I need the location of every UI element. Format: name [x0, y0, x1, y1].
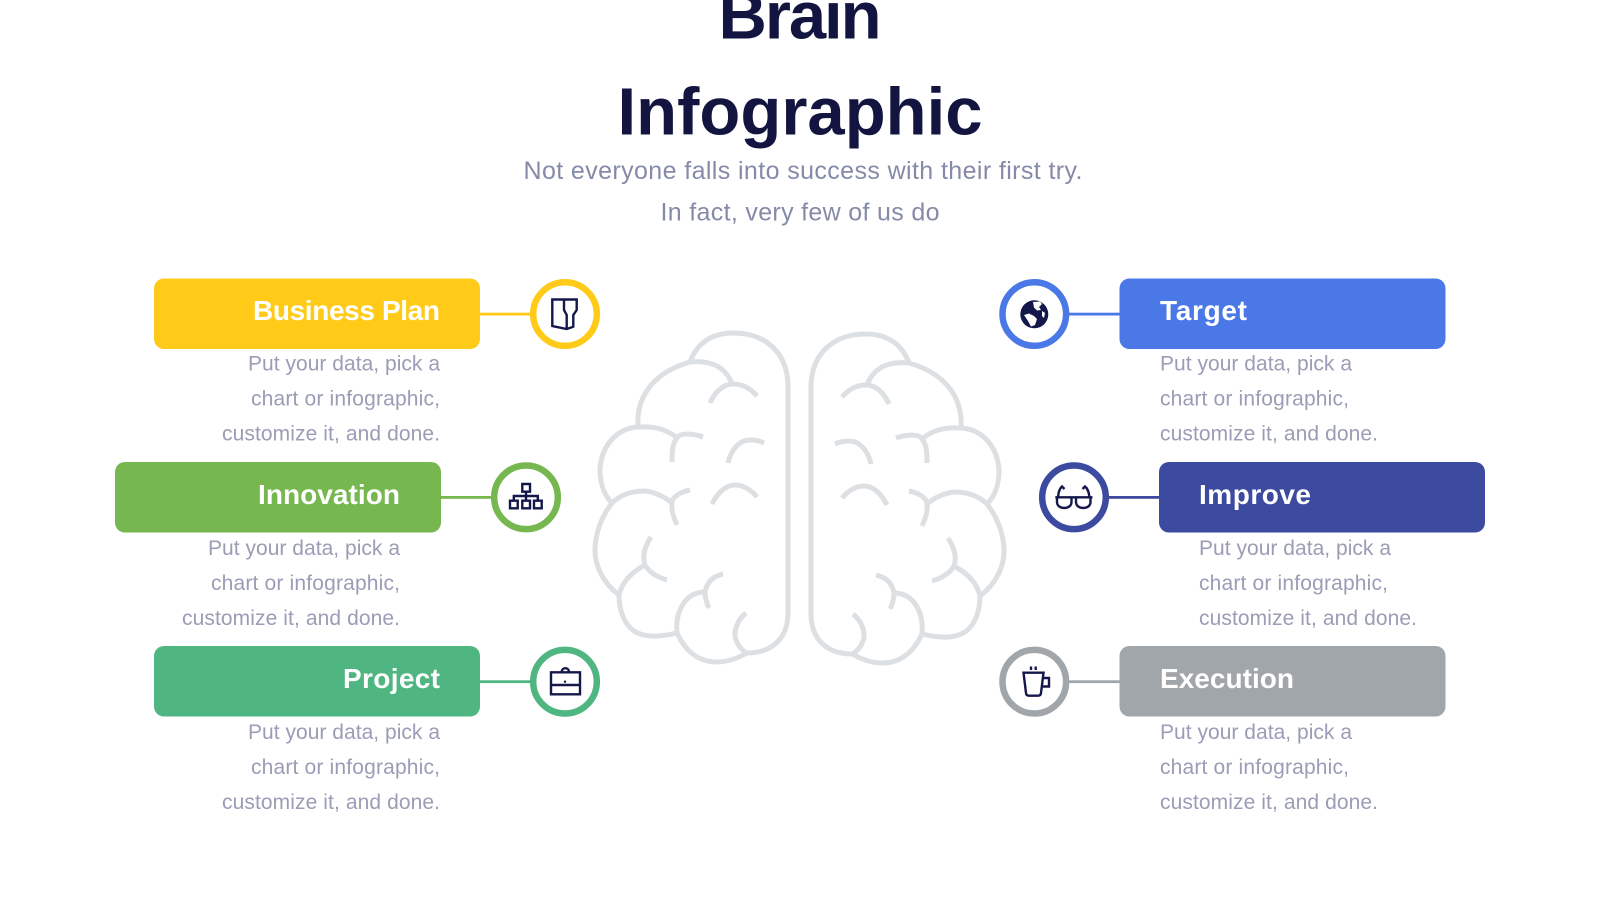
panel: improve [1042, 462, 1485, 630]
icon: coffee cup [1003, 650, 1066, 714]
connector [1065, 680, 1120, 683]
description: customize it, and done. [222, 791, 440, 814]
panel: business plan [154, 278, 597, 446]
title: Infographic [618, 74, 982, 150]
description [182, 537, 400, 630]
description [1199, 537, 1417, 630]
description: chart or infographic, [251, 756, 440, 779]
description: Put your data, pick a [208, 537, 400, 560]
heading bar: improve [1159, 462, 1485, 532]
subtitle: In fact, very few of us do [660, 199, 940, 227]
heading bar: business plan: Business Plan [253, 295, 440, 326]
description: Put your data, pick a [1160, 353, 1352, 376]
description: customize it, and done. [1160, 423, 1378, 446]
heading bar: project: Project [343, 663, 440, 694]
heading bar: innovation: Innovation [258, 479, 400, 510]
brain illustration [595, 333, 1004, 663]
heading bar: improve: Improve [1199, 479, 1311, 510]
description [222, 353, 440, 446]
description: Put your data, pick a [248, 353, 440, 376]
panel: project [154, 646, 597, 814]
description: chart or infographic, [251, 388, 440, 411]
left hemisphere [595, 333, 788, 662]
description: chart or infographic, [1160, 756, 1349, 779]
description: customize it, and done. [1199, 607, 1417, 630]
right hemisphere [811, 334, 1004, 663]
heading bar: execution [1120, 646, 1446, 716]
panel: target [1003, 278, 1446, 446]
title [618, 0, 982, 150]
description: Put your data, pick a [248, 721, 440, 744]
description [1160, 353, 1378, 446]
heading bar: target [1120, 278, 1446, 349]
description: Put your data, pick a [1199, 537, 1391, 560]
subtitle: Not everyone falls into success with their first try. [524, 157, 1082, 185]
icon: globe [1003, 282, 1066, 346]
heading bar: target: Target [1160, 295, 1247, 326]
icon: map [533, 282, 597, 346]
connector [480, 680, 535, 683]
connector [1105, 496, 1160, 499]
heading bar: business plan [154, 278, 480, 349]
connector [441, 496, 496, 499]
description: customize it, and done. [222, 423, 440, 446]
description [222, 721, 440, 814]
connector [480, 313, 535, 316]
description: Put your data, pick a [1160, 721, 1352, 744]
heading bar: innovation [115, 462, 441, 532]
subtitle [524, 157, 1082, 227]
description: chart or infographic, [1160, 388, 1349, 411]
description [1160, 721, 1378, 814]
icon: glasses [1042, 466, 1106, 529]
description: customize it, and done. [182, 607, 400, 630]
heading bar: project [154, 646, 480, 716]
description: customize it, and done. [1160, 791, 1378, 814]
icon: hierarchy [494, 466, 558, 529]
heading bar: execution: Execution [1160, 663, 1294, 694]
panel: innovation [115, 462, 558, 630]
connector [1065, 313, 1120, 316]
description: chart or infographic, [211, 572, 400, 595]
icon: briefcase [533, 650, 597, 714]
description: chart or infographic, [1199, 572, 1388, 595]
panel: execution [1003, 646, 1446, 814]
